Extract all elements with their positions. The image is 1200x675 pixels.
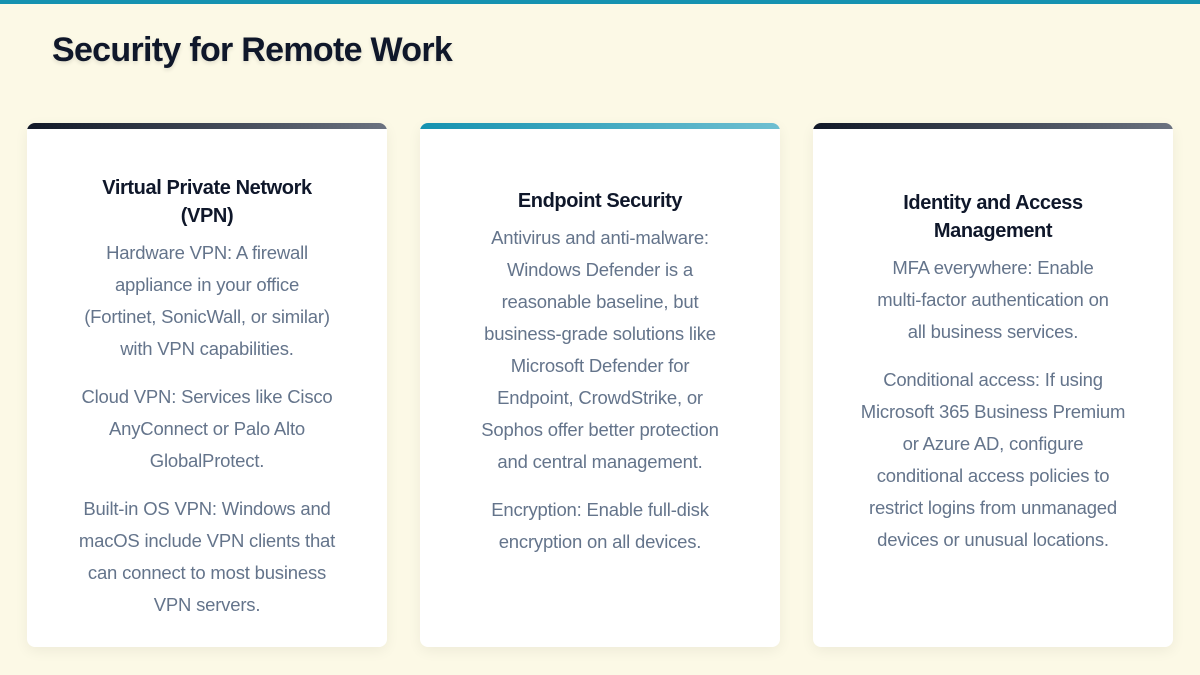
text: antivirus: Antivirus and anti-malware: (491, 227, 709, 248)
text: antivirus: reasonable baseline, but (502, 291, 698, 312)
text: encryption: Encryption: Enable full-disk (491, 499, 709, 520)
heading: identity: Management (934, 220, 1052, 242)
text: conditional access: Conditional access: If using (883, 369, 1103, 390)
text: conditional access (861, 369, 1125, 550)
panel: endpoint security (420, 123, 780, 647)
text: MFA: all business services. (908, 321, 1078, 342)
text: antivirus (481, 227, 719, 472)
text: antivirus: business-grade solutions like (484, 323, 716, 344)
text: antivirus: Sophos offer better protection (481, 419, 719, 440)
text: MFA: multi-factor authentication on (877, 289, 1109, 310)
text: antivirus: and central management. (497, 451, 703, 472)
heading: endpoint: Endpoint Security (518, 190, 682, 212)
text: hardware VPN: (Fortinet, SonicWall, or similar) (84, 306, 330, 327)
text: built-in VPN: VPN servers. (154, 594, 260, 615)
text: hardware VPN: Hardware VPN: A firewall (106, 242, 308, 263)
text: MFA: MFA everywhere: Enable (892, 257, 1094, 278)
text: cloud VPN: GlobalProtect. (150, 450, 264, 471)
heading: identity (903, 192, 1083, 242)
text: conditional access: Microsoft 365 Business Premium (861, 401, 1125, 422)
text: hardware VPN: appliance in your office (115, 274, 299, 295)
text: built-in VPN: Built-in OS VPN: Windows and (83, 498, 331, 519)
heading: VPN (102, 177, 312, 227)
panel: identity (813, 123, 1173, 647)
heading: VPN: (VPN) (181, 205, 233, 227)
text: conditional access: conditional access policies to (877, 465, 1109, 486)
text: hardware VPN (84, 242, 330, 359)
text: cloud VPN: Cloud VPN: Services like Cisco (81, 386, 333, 407)
text: conditional access: or Azure AD, configure (903, 433, 1083, 454)
title: Security for Remote Work (52, 31, 452, 69)
text: antivirus: Windows Defender is a (507, 259, 693, 280)
text: conditional access: devices or unusual locations. (877, 529, 1109, 550)
text: built-in VPN (79, 498, 336, 615)
heading: VPN: Virtual Private Network (102, 177, 312, 199)
text: encryption: encryption on all devices. (499, 531, 701, 552)
heading: identity: Identity and Access (903, 192, 1083, 214)
text: encryption (491, 499, 709, 552)
text: cloud VPN (81, 386, 333, 471)
text: hardware VPN: with VPN capabilities. (120, 338, 294, 359)
panel: VPN (27, 123, 387, 647)
text: antivirus: Endpoint, CrowdStrike, or (497, 387, 703, 408)
text: cloud VPN: AnyConnect or Palo Alto (109, 418, 305, 439)
text: MFA (877, 257, 1109, 342)
text: built-in VPN: macOS include VPN clients that (79, 530, 335, 551)
text: conditional access: restrict logins from unmanaged (869, 497, 1117, 518)
text: built-in VPN: can connect to most business (88, 562, 326, 583)
text: antivirus: Microsoft Defender for (511, 355, 689, 376)
